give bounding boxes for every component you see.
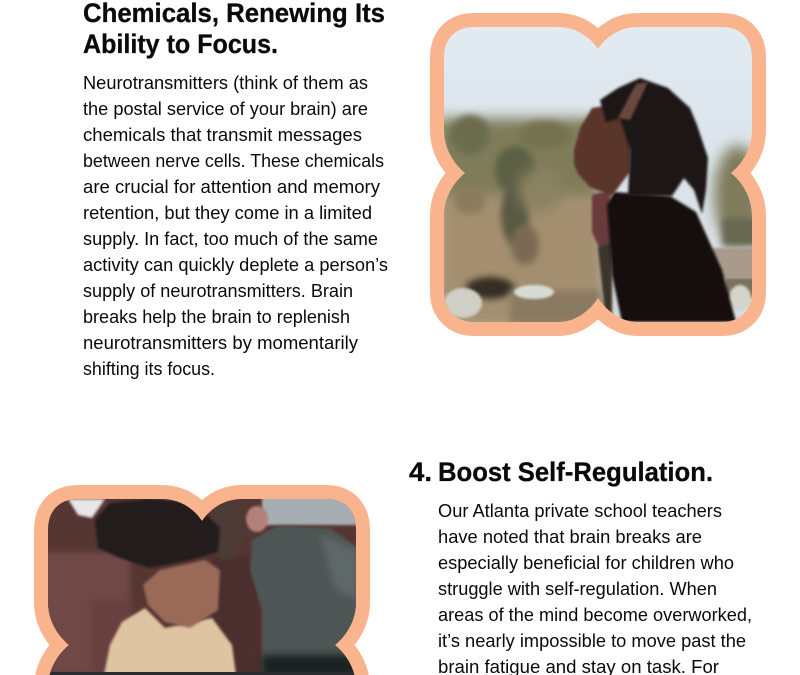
paragraph: neurotransmitters: activity can quickly deplete a person’s [83, 255, 388, 275]
paragraph: neurotransmitters: supply of neurotransmitters. Brain [83, 281, 353, 301]
photo panel: child in profile outdoors with peach frame [436, 20, 762, 330]
text block: section 4 [409, 457, 752, 675]
paragraph: neurotransmitters: neurotransmitters by momentarily [83, 333, 358, 353]
paragraph: self-regulation: it’s nearly impossible to move past the [438, 631, 746, 651]
paragraph: neurotransmitters [83, 73, 388, 379]
paragraph: self-regulation: struggle with self-regulation. When [438, 579, 717, 599]
heading: section 3 title: Ability to Focus. [83, 29, 278, 59]
paragraph: neurotransmitters: between nerve cells. These chemicals [83, 151, 384, 171]
paragraph: neurotransmitters: chemicals that transmit messages [83, 125, 362, 145]
paragraph: neurotransmitters: supply. In fact, too much of the same [83, 229, 378, 249]
paragraph: neurotransmitters: are crucial for attention and memory [83, 177, 380, 197]
paragraph: self-regulation: Our Atlanta private school teachers [438, 501, 722, 521]
text block: section 3 [83, 0, 388, 379]
paragraph: neurotransmitters: retention, but they come in a limited [83, 203, 372, 223]
paragraph: neurotransmitters: Neurotransmitters (think of them as [83, 73, 368, 93]
paragraph: self-regulation: especially beneficial for children who [438, 553, 734, 573]
paragraph: self-regulation: have noted that brain breaks are [438, 527, 702, 547]
paragraph: neurotransmitters: shifting its focus. [83, 359, 215, 379]
heading: section 4 title: 4. [409, 457, 432, 487]
heading: section 3 title [83, 0, 385, 59]
paragraph: neurotransmitters: breaks help the brain to replenish [83, 307, 350, 327]
photo panel: young girl playing with peach frame [40, 495, 365, 675]
heading: section 4 title: Boost Self-Regulation. [438, 457, 713, 487]
paragraph: self-regulation: areas of the mind become overworked, [438, 605, 752, 625]
paragraph: self-regulation [438, 501, 752, 675]
paragraph: neurotransmitters: the postal service of your brain) are [83, 99, 368, 119]
